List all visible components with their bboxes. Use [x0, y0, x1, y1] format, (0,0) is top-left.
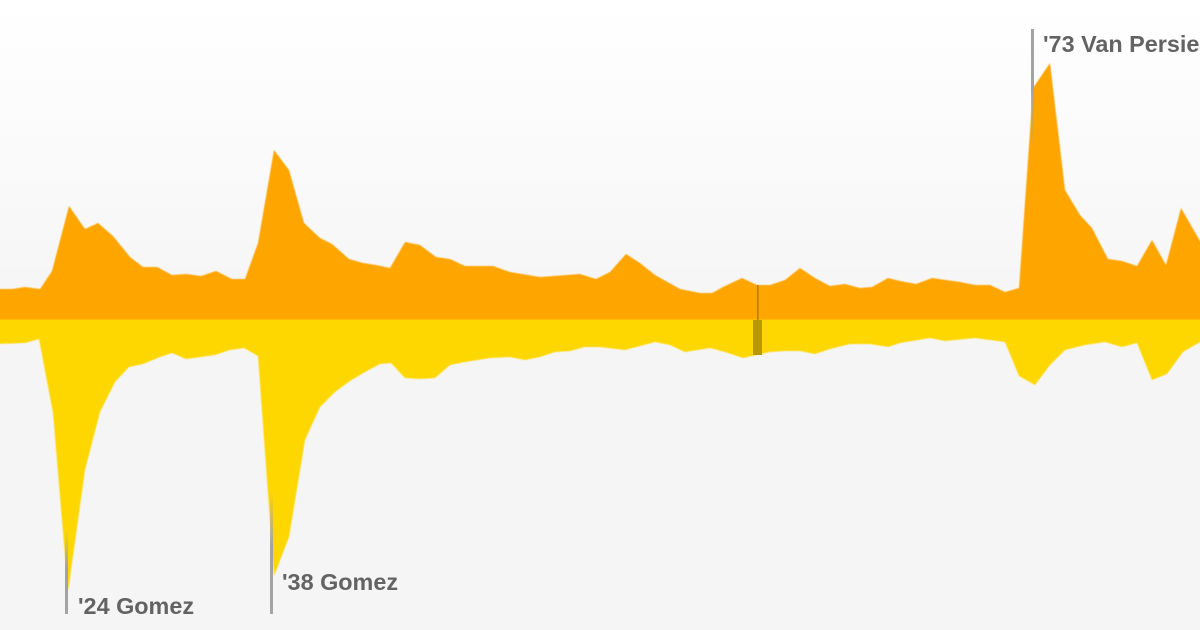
goal marker: 73 Van Persie [1031, 29, 1199, 149]
goal marker: 38 Gomez [270, 490, 398, 614]
area: away team shots below axis [0, 320, 1200, 592]
goal marker: 73 Van Persie: '73 Van Persie [1043, 31, 1199, 57]
goal marker: 24 Gomez: '24 Gomez [78, 593, 194, 619]
marker: half time lower bar [753, 320, 762, 355]
marker: half time upper tick [757, 285, 759, 320]
goal marker: 38 Gomez: '38 Gomez [282, 569, 398, 595]
background [0, 0, 1200, 320]
area: home team shots above axis [0, 63, 1200, 324]
goal marker: 24 Gomez [65, 530, 194, 619]
